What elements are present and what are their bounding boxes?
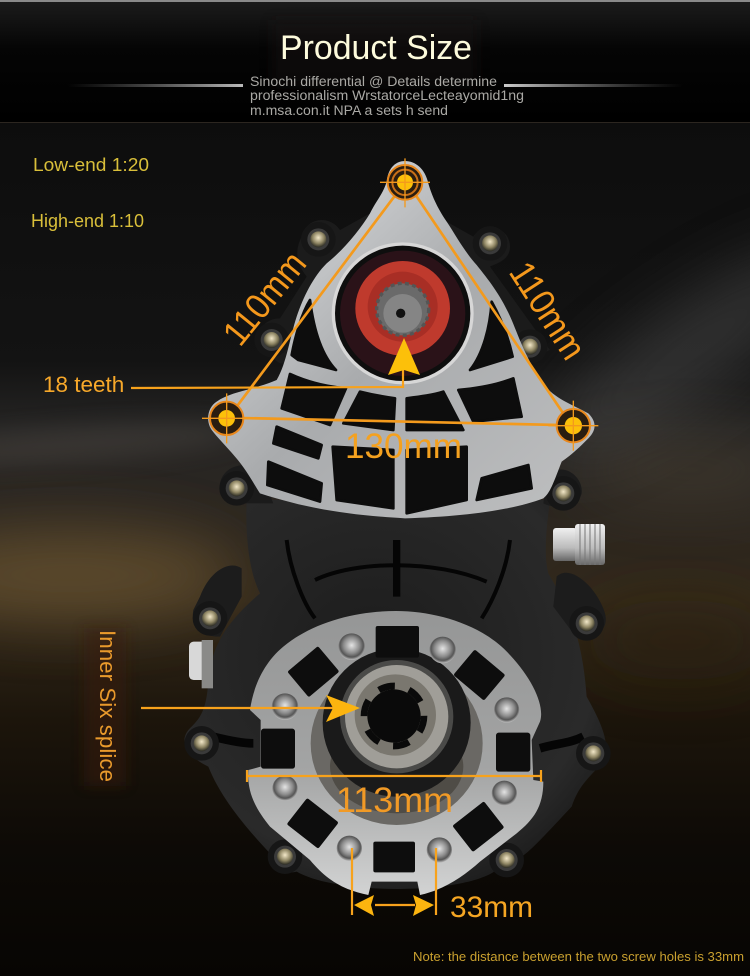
label: 130mm: 130mm <box>345 427 462 466</box>
label: 110mm right: 110mm <box>501 254 594 367</box>
arrow: 18 teeth leader <box>131 338 420 388</box>
icon: left hole target <box>202 393 252 443</box>
differential: lower housing body <box>184 500 611 895</box>
label: 18 teeth: 18 teeth <box>43 372 124 397</box>
label: low-end ratio: Low-end 1:20 <box>33 155 149 175</box>
title: Product Size <box>280 29 472 67</box>
subtitle text block <box>250 74 524 118</box>
lugs and mounting bolts <box>219 213 582 511</box>
header band <box>0 0 750 123</box>
subtitle text block: professionalism WrstatorceLecteayomid1ng <box>250 88 524 103</box>
subtitle text block: Sinochi differential @ Details determine <box>250 74 497 89</box>
differential: upper triangular flange <box>208 161 595 518</box>
subtitle text block: m.msa.con.it NPA a sets h send <box>250 103 448 118</box>
flange ring with holes <box>248 611 543 895</box>
label background: inner six splice <box>84 628 126 786</box>
label: inner six splice: Inner Six splice <box>95 630 120 782</box>
icon: lugs and mounting bolts <box>184 565 611 877</box>
icon: right hole target <box>548 401 598 451</box>
dimension: 113mm line <box>247 770 541 782</box>
plate windows <box>267 300 532 513</box>
icon: side bolt <box>189 640 213 688</box>
label: 110mm left: 110mm <box>214 243 314 353</box>
label: high-end ratio: High-end 1:10 <box>31 211 144 231</box>
icon: knurled side bolt <box>553 524 605 565</box>
label: 33mm: 33mm <box>450 891 533 924</box>
footnote: Note: the distance between the two screw holes is 33mm <box>413 950 744 964</box>
label: 113mm: 113mm <box>336 781 453 820</box>
icon: top hole target <box>380 158 430 207</box>
output shaft with red seal <box>332 242 474 384</box>
annotation: triangle dimension lines <box>202 158 598 451</box>
dimension: 33mm arrows <box>352 848 436 916</box>
arrow: inner spline pointer <box>141 695 360 722</box>
